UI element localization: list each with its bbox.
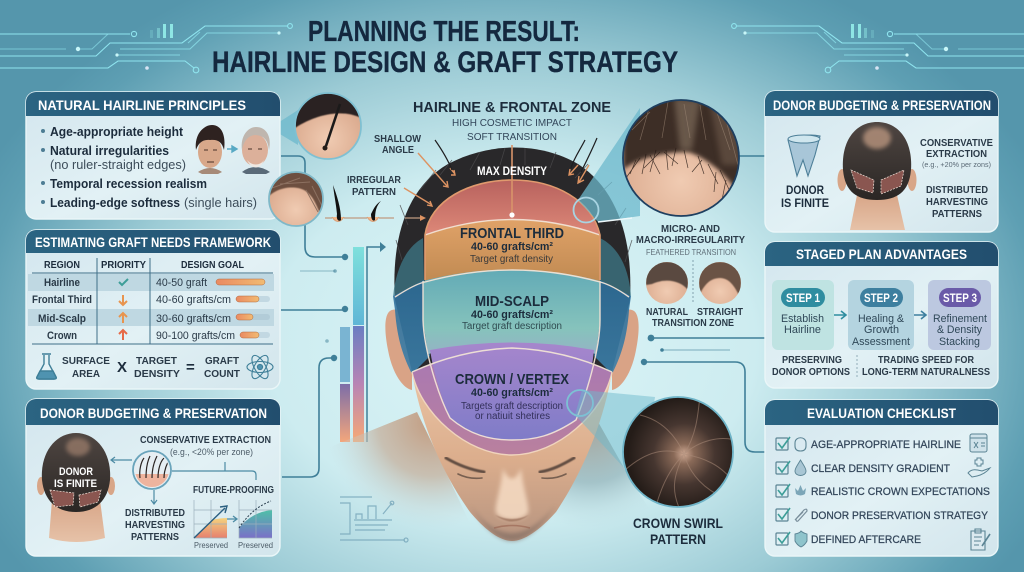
magnified photo: feathered hairline [623, 95, 745, 216]
text: micro and macro irregularity: MACRO-IRREGULARITY [636, 234, 745, 246]
formula: AREA [72, 368, 100, 380]
zone: side band upper [393, 238, 631, 296]
circuit decoration: top right [732, 24, 1024, 73]
step 1: STEP 1 [786, 291, 820, 305]
comparison photo: straight [699, 262, 741, 304]
label: shallow angle [374, 133, 421, 156]
benefit: trading speed [862, 354, 990, 378]
checklist item: crown [776, 484, 990, 498]
back of head illustration [838, 122, 916, 230]
benefit: preserving donor options [772, 354, 850, 378]
checklist item: hairline [776, 437, 961, 451]
nose shadow [495, 515, 529, 522]
circuit decoration: top left [0, 24, 292, 73]
header [765, 242, 998, 266]
text: micro and macro irregularity: FEATHERED TRANSITION [646, 247, 736, 257]
future-proofing charts: Preserved [194, 540, 228, 550]
extraction text [920, 137, 993, 220]
icon: atom [247, 353, 273, 381]
header [765, 400, 998, 425]
zone label: mid-scalp: Target graft description [462, 321, 562, 332]
donor is finite text: DONOR [786, 185, 825, 197]
extraction text: CONSERVATIVE [920, 137, 993, 149]
nose [496, 468, 528, 520]
table: Crown [47, 330, 77, 342]
bullet list: Leading-edge softness [50, 195, 180, 210]
ear: right [612, 309, 639, 390]
future-proofing charts: Preserved [238, 540, 273, 550]
zone label: mid-scalp: 40-60 grafts/cm² [471, 309, 553, 321]
table: Hairline [44, 277, 80, 289]
zone: mid-scalp [423, 270, 600, 354]
title [212, 16, 678, 79]
label: shallow angle: SHALLOW [374, 133, 421, 145]
extraction text: (e.g., +20% per zons) [922, 160, 991, 169]
panel: donor budgeting left [26, 399, 280, 556]
text: micro and macro irregularity [636, 223, 745, 257]
conservative extraction text [140, 434, 271, 458]
checklist item: donor [776, 508, 989, 522]
hair strands at hairline [435, 138, 597, 172]
ear: left [385, 309, 412, 390]
extraction text: PATTERNS [932, 208, 982, 220]
extraction text: HARVESTING [926, 196, 988, 208]
heading: hairline and frontal zone: SOFT TRANSITION [467, 131, 557, 143]
panel: estimating graft needs [26, 230, 280, 389]
zone label: crown vertex: CROWN / VERTEX [455, 371, 569, 388]
density gradient bars [340, 242, 386, 442]
step 2 [848, 280, 914, 350]
connector dots [325, 254, 664, 365]
neck and shoulder: left [310, 412, 480, 572]
hair mass [394, 148, 630, 372]
centre marker [509, 145, 515, 218]
table: PRIORITY [101, 259, 146, 271]
distributed harvesting text: HARVESTING [125, 519, 185, 531]
step 2: STEP 2 [864, 291, 898, 305]
donor is finite text [781, 185, 829, 210]
header: EVALUATION CHECKLIST [807, 405, 956, 421]
labels: natural vs straight: TRANSITION ZONE [652, 317, 734, 329]
icon: cup of grafts [788, 135, 820, 176]
arrow: step 1 to 2 [834, 311, 846, 319]
hair strands [396, 148, 632, 262]
zone label: crown vertex [455, 371, 569, 422]
table [28, 258, 274, 344]
checklist item: donor: DONOR PRESERVATION STRATEGY [811, 510, 989, 522]
bullet list: (single hairs) [184, 195, 257, 210]
magnified photo: crown swirl [623, 395, 735, 510]
follicle diagram [325, 185, 426, 222]
header: DONOR BUDGETING & PRESERVATION [40, 405, 267, 421]
conservative extraction text: (e.g., <20% per zone) [170, 447, 253, 458]
step 3: Refinement [933, 313, 987, 325]
benefit: preserving donor options: PRESERVING [782, 354, 842, 366]
distributed harvesting text: DISTRIBUTED [125, 507, 185, 519]
label: crown swirl pattern [633, 515, 723, 547]
labels: natural vs straight [646, 306, 743, 329]
table: DESIGN GOAL [181, 259, 244, 271]
table: 40-50 graft [156, 277, 207, 289]
zone label: crown vertex: 40-60 grafts/cm² [471, 387, 553, 399]
icon: form window [970, 434, 987, 452]
step 1: Establish [781, 313, 824, 325]
label: crown swirl pattern: CROWN SWIRL [633, 515, 723, 531]
header [765, 91, 998, 116]
header [26, 399, 280, 425]
header [26, 230, 280, 253]
magnifier: crown ring [567, 390, 593, 416]
magnifier: frontal ring [574, 198, 598, 222]
panel: donor budgeting right [765, 91, 998, 232]
comparison divider [692, 260, 694, 304]
back of head illustration: DONOR [59, 466, 93, 478]
eyebrows and eyes [446, 458, 574, 478]
step 3: & Density [937, 324, 982, 336]
label: irregular pattern: IRREGULAR [347, 174, 401, 186]
text: micro and macro irregularity: MICRO- AND [661, 223, 720, 235]
step 2: Growth [864, 324, 899, 336]
table: Mid-Scalp [38, 313, 86, 325]
formula [62, 355, 241, 380]
future-proofing charts: FUTURE-PROOFING [193, 484, 274, 496]
future-proofing charts [193, 484, 274, 550]
zone label: frontal third: Target graft density [470, 254, 553, 265]
step 3: Stacking [939, 336, 980, 348]
formula: GRAFT [205, 355, 240, 367]
table: Frontal Third [32, 294, 92, 306]
zone label: crown vertex: or natiuit shetires [475, 411, 550, 422]
zone: frontal red [425, 180, 600, 235]
decorative mini chart icon [340, 497, 408, 542]
formula: SURFACE [62, 355, 110, 367]
title: HAIRLINE DESIGN & GRAFT STRATEGY [212, 46, 678, 79]
header [26, 92, 280, 116]
checklist item: crown: REALISTIC CROWN EXPECTATIONS [811, 486, 990, 498]
goal bars [216, 279, 270, 338]
zone: frontal third orange [425, 220, 600, 282]
zone label: frontal third [460, 225, 564, 265]
bullet list: Natural irregularities [50, 143, 169, 158]
formula: COUNT [204, 368, 241, 380]
zone: crown inner [430, 342, 594, 440]
label: irregular pattern [347, 174, 401, 198]
conservative extraction text: CONSERVATIVE EXTRACTION [140, 434, 271, 446]
icon: hand with cross [968, 458, 990, 477]
bullet list [41, 124, 257, 210]
icon: clipboard with pencil [971, 529, 990, 550]
checklist item: aftercare [776, 531, 921, 547]
zone label: frontal third: FRONTAL THIRD [460, 225, 564, 242]
heading: hairline and frontal zone: HIGH COSMETIC IMPACT [452, 117, 573, 129]
mouth [494, 526, 530, 528]
benefit: trading speed: TRADING SPEED FOR [878, 354, 974, 366]
formula: DENSITY [134, 368, 180, 380]
face [412, 356, 612, 541]
table: 90-100 grafts/cm [156, 330, 235, 342]
extraction text: DISTRIBUTED [926, 184, 988, 196]
checklist item: density: CLEAR DENSITY GRADIENT [811, 463, 950, 475]
donor is finite text: IS FINITE [781, 198, 829, 210]
heading: hairline and frontal zone: HAIRLINE & FRONTAL ZONE [413, 99, 611, 116]
zone label: frontal third: 40-60 grafts/cm² [471, 241, 553, 253]
magnifier beams [264, 108, 655, 485]
extraction text: EXTRACTION [926, 148, 987, 160]
comparison photo: natural [646, 262, 688, 304]
arrow: step 2 to 3 [914, 311, 926, 319]
neck and shoulder: right [540, 420, 690, 572]
zone outlines [395, 220, 629, 455]
step 1: Hairline [784, 324, 821, 336]
beard shadow [470, 505, 556, 541]
header: NATURAL HAIRLINE PRINCIPLES [38, 97, 246, 113]
table: 40-60 grafts/cm [156, 294, 231, 306]
magnified photo: hairline strand [295, 93, 361, 159]
step 3 [928, 280, 991, 350]
step 2: Healing & [858, 313, 905, 325]
label: crown swirl pattern: PATTERN [650, 531, 706, 547]
labels: natural vs straight: NATURAL [646, 306, 688, 318]
step 3: STEP 3 [943, 291, 977, 305]
zone: side band lower [393, 280, 631, 374]
distributed harvesting text: PATTERNS [131, 531, 179, 543]
bullet list: (no ruler-straight edges) [50, 157, 186, 172]
follicle inset circle [111, 451, 256, 504]
zone: crown outer [412, 350, 612, 455]
priority icons [119, 279, 128, 340]
icon: older face [242, 127, 270, 174]
back of head illustration [37, 433, 115, 542]
checklist item: hairline: AGE-APPROPRIATE HAIRLINE [811, 439, 961, 451]
zone label: max density: MAX DENSITY [477, 164, 547, 178]
checklist item: aftercare: DEFINED AFTERCARE [811, 534, 921, 546]
beam edge line [598, 218, 632, 222]
header: ESTIMATING GRAFT NEEDS FRAMEWORK [35, 234, 271, 250]
icon: flask [37, 354, 56, 379]
formula: TARGET [136, 355, 178, 367]
zone label: mid-scalp [462, 293, 562, 332]
orange pointer arrows [404, 153, 589, 206]
magnified photo: temple hairline [269, 172, 323, 226]
formula: X [117, 359, 127, 376]
formula: = [186, 359, 195, 376]
distributed harvesting text [125, 507, 185, 543]
benefit: trading speed: LONG-TERM NATURALNESS [862, 366, 990, 378]
checklist item: density [776, 460, 950, 476]
label: irregular pattern: PATTERN [352, 186, 396, 198]
panel: natural hairline principles [26, 92, 280, 219]
connector lines [281, 156, 765, 477]
icon: young face [196, 125, 224, 174]
step 1 [772, 280, 834, 350]
zone label: mid-scalp: MID-SCALP [475, 293, 549, 310]
label: shallow angle: ANGLE [382, 144, 414, 156]
labels: natural vs straight: STRAIGHT [697, 306, 743, 318]
bullet list: Age-appropriate height [50, 124, 184, 139]
header: STAGED PLAN ADVANTAGES [796, 246, 967, 262]
panel: evaluation checklist [765, 400, 998, 556]
divider [856, 355, 858, 378]
arrow: young to old [227, 146, 237, 152]
hairline arc [425, 180, 600, 280]
title: PLANNING THE RESULT: [308, 16, 580, 48]
benefit: preserving donor options: DONOR OPTIONS [772, 366, 850, 378]
back of head illustration: IS FINITE [54, 478, 97, 490]
table: REGION [44, 259, 80, 271]
step 2: Assessment [852, 336, 910, 348]
heading: hairline and frontal zone [413, 99, 611, 143]
zone label: crown vertex: Targets graft description [461, 401, 563, 412]
central head illustration [310, 145, 690, 572]
bullet list: Temporal recession realism [50, 176, 207, 191]
panel: staged plan advantages [765, 242, 998, 388]
table: 30-60 grafts/cm [156, 313, 231, 325]
